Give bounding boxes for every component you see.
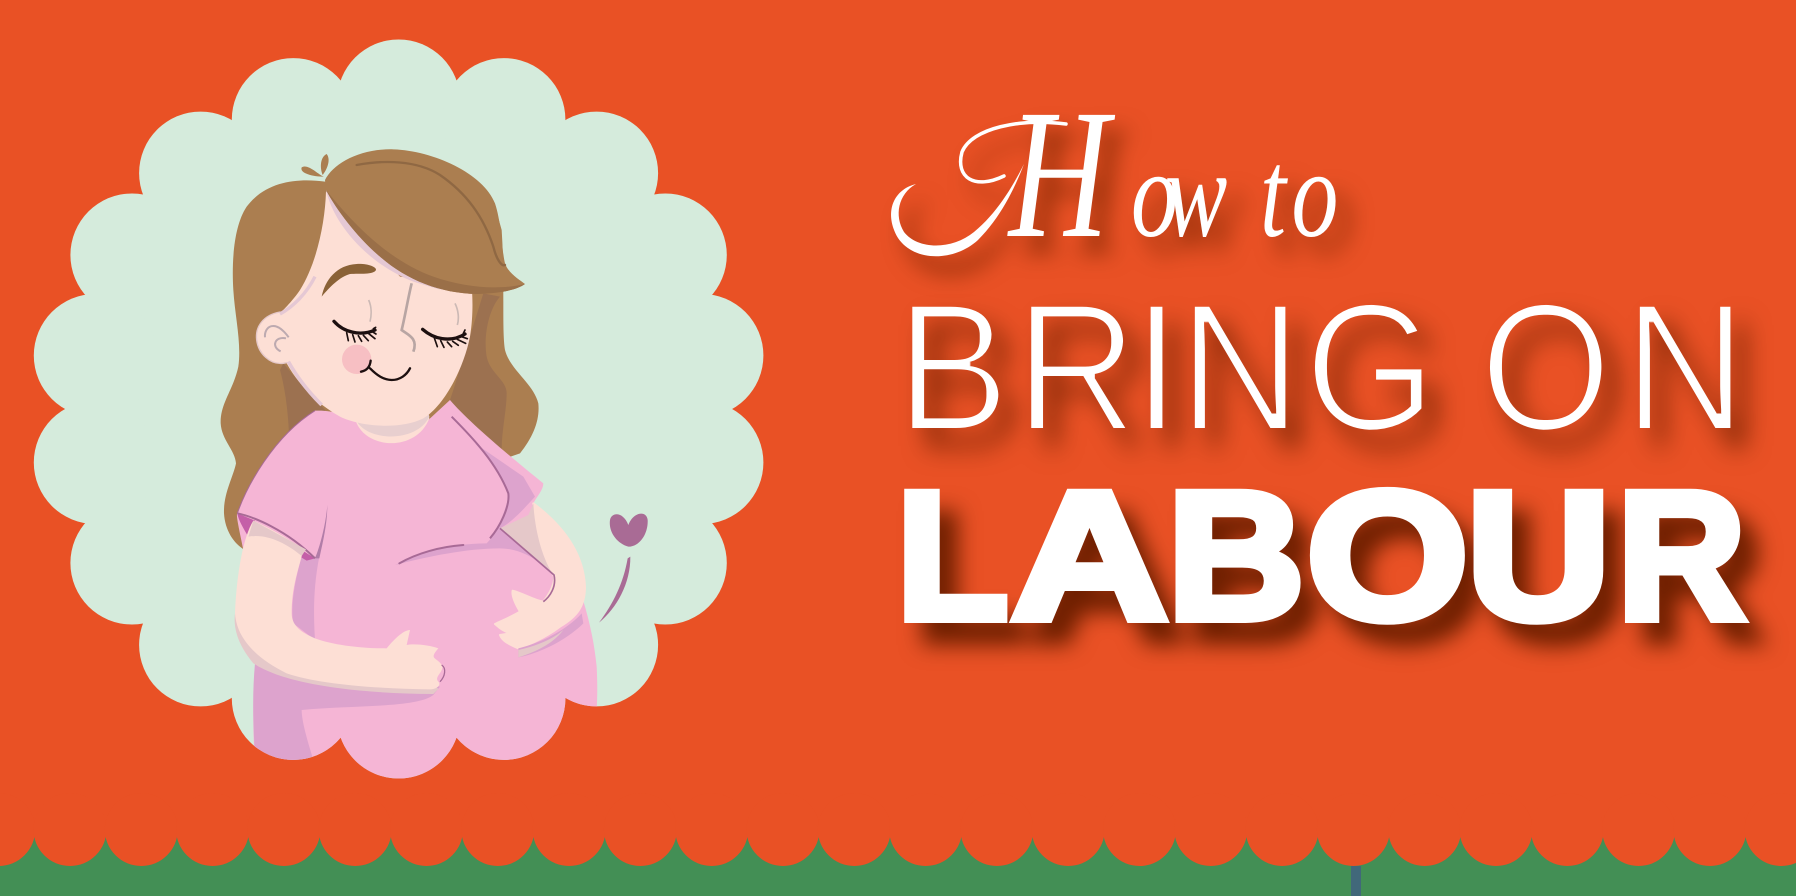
back hair bbox=[221, 180, 539, 550]
green scalloped footer band bbox=[0, 793, 1796, 896]
title: LABOUR: L bbox=[896, 454, 1008, 658]
title: How to bbox=[891, 72, 1338, 277]
face bbox=[265, 190, 472, 426]
blue post stub bbox=[1351, 866, 1361, 896]
collar bbox=[356, 414, 430, 444]
fringe hair bbox=[301, 149, 525, 294]
nose and brow lines bbox=[402, 283, 415, 352]
title: LABOUR: A bbox=[1011, 454, 1168, 658]
closed eyes with lashes bbox=[334, 321, 467, 347]
arms and hands bbox=[235, 417, 585, 694]
scalloped mint badge bbox=[34, 40, 763, 778]
title: How to: to bbox=[1260, 125, 1338, 263]
title: LABOUR: R bbox=[1618, 454, 1746, 658]
title: How to: How bbox=[1009, 72, 1227, 277]
title: BRING ON: BRING ON bbox=[896, 266, 1746, 469]
title: LABOUR: B bbox=[1168, 454, 1304, 658]
illustration: pregnant woman bbox=[221, 149, 597, 780]
cheek blush bbox=[342, 345, 371, 374]
ear bbox=[256, 311, 288, 364]
smile bbox=[361, 361, 410, 380]
title: LABOUR: O bbox=[1306, 454, 1468, 658]
eyebrow bbox=[322, 264, 376, 297]
icon: heart with tail bbox=[599, 514, 648, 623]
title: LABOUR: U bbox=[1466, 454, 1610, 658]
dress bbox=[237, 400, 597, 780]
